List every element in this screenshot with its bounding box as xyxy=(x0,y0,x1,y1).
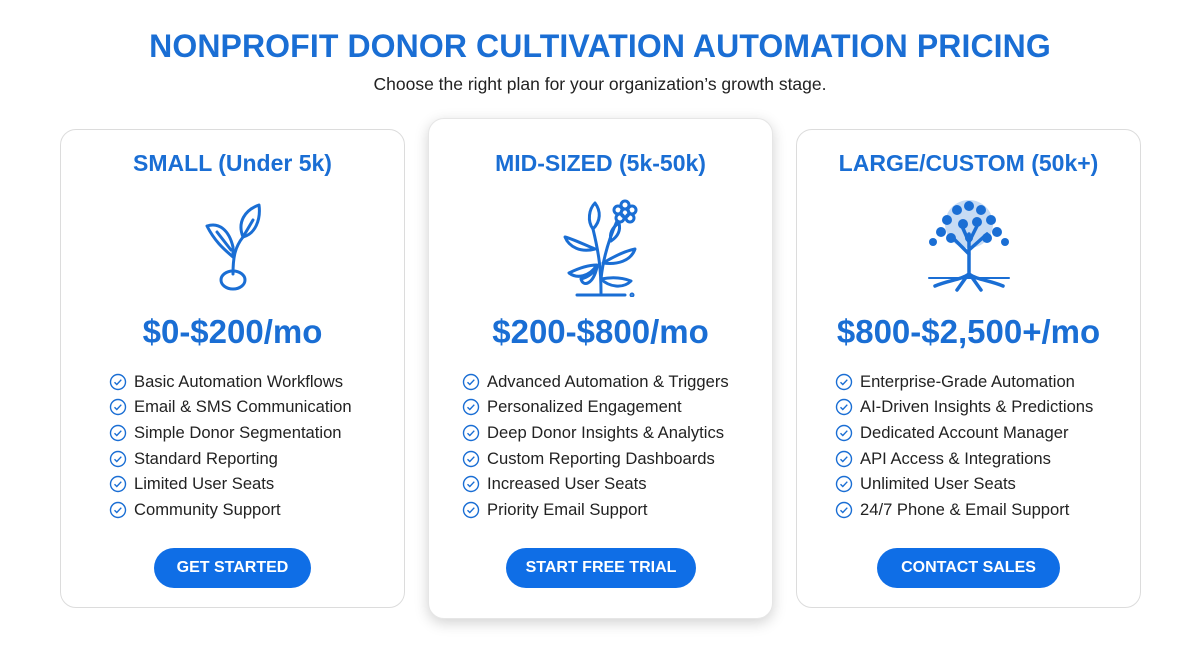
button: start free trial: START FREE TRIAL xyxy=(526,559,676,576)
feature list: mid: Custom Reporting Dashboards xyxy=(487,449,715,468)
feature list: large: 24/7 Phone & Email Support xyxy=(860,500,1069,519)
feature list: mid: Increased User Seats xyxy=(487,474,647,493)
icon: sprout xyxy=(205,204,261,290)
heading: small: SMALL (Under 5k) xyxy=(133,150,332,176)
panel: small xyxy=(60,129,405,608)
feature list: mid: Priority Email Support xyxy=(487,500,647,519)
button: contact sales xyxy=(877,548,1060,588)
heading: mid: MID-SIZED (5k-50k) xyxy=(495,150,706,176)
panel: mid-sized xyxy=(428,118,773,619)
button: get started xyxy=(154,548,311,588)
feature list: large xyxy=(836,372,1093,519)
feature list: small: Simple Donor Segmentation xyxy=(134,423,342,442)
subtitle: Choose the right plan for your organization’s growth stage. xyxy=(373,74,826,94)
button: start free trial xyxy=(506,548,696,588)
panel: large xyxy=(796,129,1141,608)
icon: tree xyxy=(928,200,1010,292)
price: small: $0-$200/mo xyxy=(143,313,322,350)
feature list: mid: Personalized Engagement xyxy=(487,397,682,416)
button: contact sales: CONTACT SALES xyxy=(901,559,1036,576)
feature list: large: Dedicated Account Manager xyxy=(860,423,1068,442)
feature list: mid: Advanced Automation & Triggers xyxy=(487,372,729,391)
feature list: small: Standard Reporting xyxy=(134,449,278,468)
price: large: $800-$2,500+/mo xyxy=(837,313,1100,350)
feature list: large: Enterprise-Grade Automation xyxy=(860,372,1075,391)
feature list: mid: Deep Donor Insights & Analytics xyxy=(487,423,724,442)
feature list: small: Email & SMS Communication xyxy=(134,397,352,416)
price: mid: $200-$800/mo xyxy=(492,313,709,350)
title: NONPROFIT DONOR CULTIVATION AUTOMATION PRICING xyxy=(149,28,1051,64)
feature list: mid xyxy=(462,372,729,519)
feature list: small: Limited User Seats xyxy=(134,474,274,493)
feature list: large: Unlimited User Seats xyxy=(860,474,1016,493)
heading: large: LARGE/CUSTOM (50k+) xyxy=(839,150,1098,176)
feature list: small: Community Support xyxy=(134,500,281,519)
feature list: large: AI-Driven Insights & Predictions xyxy=(860,397,1093,416)
icon: flowering plant xyxy=(564,200,638,297)
feature list: small: Basic Automation Workflows xyxy=(134,372,343,391)
button: get started: GET STARTED xyxy=(177,559,288,576)
feature list: large: API Access & Integrations xyxy=(860,449,1051,468)
feature list: small xyxy=(110,372,352,519)
